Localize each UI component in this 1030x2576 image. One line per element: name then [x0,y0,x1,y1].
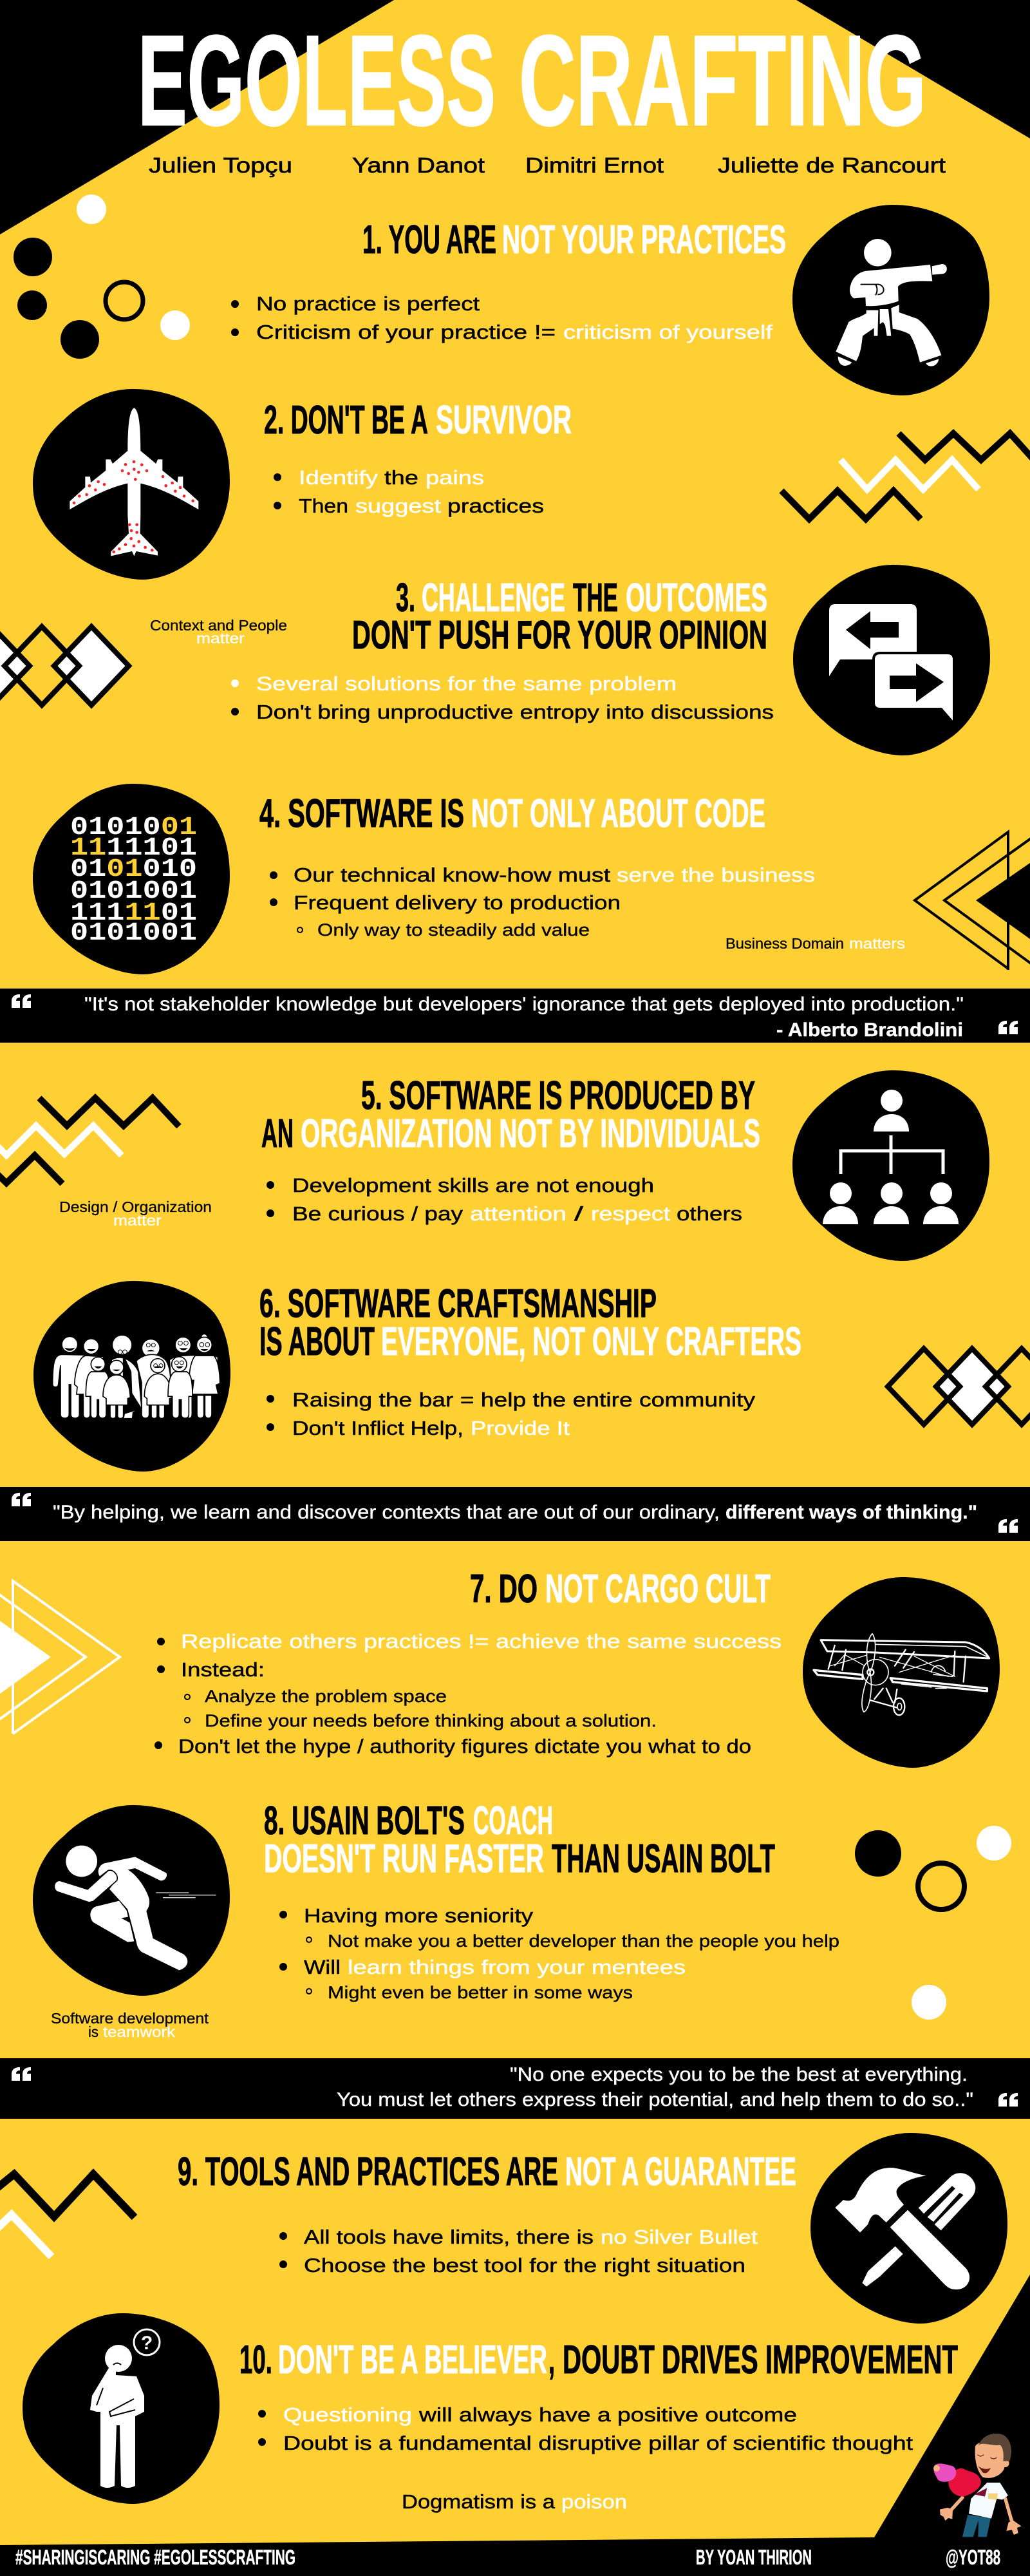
note: context and people: Context and People [150,617,287,634]
bullets 2: practices [447,495,544,517]
note: dogmatism is a poison [402,2490,627,2513]
authors: Dimitri Ernot [525,153,664,177]
decor: zigzags right [782,433,1030,519]
bullets 4: serve the business [617,864,815,886]
bullets 4: Our technical know-how must [294,864,610,886]
quote bar 3 [0,2058,1030,2119]
panel 3: challenge the outcomes [0,565,990,755]
bullets 6: Raising the bar = help the entire community [292,1388,756,1411]
heading 2: SURVIVOR [436,398,572,442]
icon: binary code: 1111101 [70,834,197,863]
note: dogmatism is a poison: poison [561,2490,627,2513]
heading 6: 6. SOFTWARE CRAFTSMANSHIP [259,1282,657,1326]
heading 5 [261,1074,760,1156]
bullets 6: Provide It [471,1417,570,1439]
authors [149,153,946,177]
bullets 10: Questioning [283,2403,412,2426]
decor: zigzags left [0,1098,179,1184]
bullets 5 [267,1174,742,1225]
bullets 7: Don't let the hype / authority figures dictate you what to do [178,1735,751,1757]
top right black corner [796,0,1030,138]
bullets 1: No practice is perfect [256,292,480,315]
bullets 5: attention [470,1202,566,1225]
footer hashtags: #SHARINGISCARING #EGOLESSCRAFTING [15,2546,295,2569]
icon: chat bubbles [793,565,990,755]
bullets 5: respect [591,1202,670,1225]
decor: chevrons right [915,832,1030,970]
heading 3: OUTCOMES [626,576,767,620]
note: context and people: matter [196,630,245,647]
heading 10 [239,2338,958,2382]
icon: biplane [803,1577,1000,1768]
icon: avatar with heart [933,2434,1022,2537]
bullets 10 [258,2403,913,2454]
opening quote mark [12,994,31,1008]
decor: circles right [855,1826,1011,2020]
quote text [53,1502,977,1523]
heading 8: DOESN'T RUN FASTER [264,1837,544,1881]
bullets 8: Having more seniority [304,1904,534,1927]
bullets 1: criticism of yourself [563,321,772,343]
heading 6: IS ABOUT [259,1320,375,1364]
bullets 9: All tools have limits, there is [304,2226,594,2248]
heading 5: AN [261,1112,294,1156]
panel 9: tools and practices [0,2133,1007,2324]
icon: karate figure [792,205,989,395]
bullets 4: Only way to steadily add value [317,920,590,940]
footer band [0,2537,1030,2576]
heading 8 [264,1799,775,1881]
note: software development is teamwork: Software development [51,2010,209,2027]
bullets 2: pains [426,466,484,489]
heading 3: DON'T PUSH FOR YOUR OPINION [352,613,767,658]
panel 2: don't be a survivor [33,389,1030,580]
bullets 2: suggest [355,495,441,517]
heading 1: 1. YOU ARE [362,218,496,262]
bullets 3: Don't bring unproductive entropy into discussions [256,701,774,723]
note: design organization: Design / Organization [59,1198,212,1215]
icon: group of people [33,1281,230,1472]
footer handle: @YOT88 [946,2546,1000,2569]
quote text [337,2064,973,2110]
heading 9: 9. TOOLS AND PRACTICES ARE [178,2150,558,2194]
bullets 8: learn things from your mentees [348,1956,686,1978]
panel 10: don't be a believer [23,2313,1022,2537]
note: design organization [59,1198,212,1229]
icon: binary code [33,784,230,974]
bullets 2: Identify [299,466,379,489]
note: context and people [150,617,287,647]
icon: binary code: 0101001 [70,919,197,948]
icon: binary code: 01010 01 [70,813,197,842]
decor: diamonds right [888,1349,1030,1425]
note: software development is teamwork: teamwork [103,2023,176,2040]
icon: thinking person: ? [141,2333,153,2354]
bullets 5: others [677,1202,742,1225]
authors: Juliette de Rancourt [718,153,946,177]
bullets 2: Then [299,495,348,517]
quote text: "By helping, we learn and discover contexts that are out of our ordinary, [53,1502,720,1523]
heading 10: 10. [239,2338,272,2382]
heading 4: 4. SOFTWARE IS [259,791,464,836]
heading 8: THAN USAIN BOLT [552,1837,775,1881]
footer author: BY YOAN THIRION [696,2546,812,2569]
decor: circles top left [14,194,190,359]
bullets 3 [231,672,774,723]
heading 3: CHALLENGE [422,576,565,620]
bullets 5: Development skills are not enough [292,1174,654,1197]
bullets 7: Analyze the problem space [205,1687,447,1706]
bullets 8: Might even be better in some ways [328,1983,633,2002]
heading 3: 3. [396,576,415,620]
heading 2: 2. DON'T BE A [264,398,428,442]
quote bar 1 [0,989,1030,1043]
quote text: - Alberto Brandolini [776,1019,963,1041]
closing quote mark [998,1519,1018,1533]
bullets 8: Will [304,1956,341,1978]
bullets 4 [270,864,815,940]
closing quote mark [998,1021,1018,1034]
bullets 2 [274,466,544,517]
heading 1: NOT YOUR PRACTICES [502,218,786,262]
panel 7: do not cargo cult [0,1567,1000,1768]
note: software development is teamwork: is [88,2023,98,2040]
authors: Yann Danot [352,153,485,177]
closing quote mark [998,2093,1018,2107]
heading 7: NOT CARGO CULT [545,1567,771,1611]
note: business domain [726,935,905,952]
icon: binary code: 0101010 [70,855,197,884]
panel 4: software is not only about code [33,784,1030,974]
quote text: different ways of thinking." [726,1502,977,1523]
panel 8: usain bolt's coach [33,1799,1011,2040]
heading 5: ORGANIZATION NOT BY INDIVIDUALS [301,1112,760,1156]
title: EGOLESS [138,9,496,153]
note: dogmatism is a poison: Dogmatism is a [402,2490,556,2513]
panel 5: produced by an organization [0,1070,989,1261]
bottom right black corner [874,2275,1030,2550]
heading 4: NOT ONLY ABOUT CODE [471,791,765,836]
heading 4 [259,791,765,836]
icon: airplane with bullet holes [33,389,230,580]
heading 8: COACH [473,1799,553,1843]
note: business domain: matters [849,935,905,952]
icon: binary code: 111 1101 [70,899,197,928]
top left black corner [0,0,394,234]
quote text: You must let others express their potential, and help them to do so.." [337,2089,973,2110]
decor: zigzags left [0,2174,135,2257]
bullets 1: Criticism of your practice != [256,321,556,343]
bullets 1 [231,292,772,343]
bullets 3: Several solutions for the same problem [256,672,677,695]
panel 6: software craftsmanship [33,1281,1030,1472]
icon: organization chart [792,1070,989,1261]
heading 10: , [548,2338,555,2382]
bullets 4: Frequent delivery to production [294,891,621,914]
note: design organization: matter [113,1212,162,1229]
icon: runner [33,1805,230,1996]
quote text: "No one expects you to be the best at everything. [510,2064,968,2085]
opening quote mark [12,1493,31,1506]
decor: diamonds left [0,627,129,705]
icon: thinking person [23,2313,220,2504]
icon: binary code: 0101001 [70,877,197,906]
bullets 5: / [574,1202,584,1225]
bullets 7 [154,1630,782,1757]
bullets 9: Choose the best tool for the right situation [304,2254,745,2277]
heading 6 [259,1282,801,1364]
bullets 7: Instead: [181,1658,265,1681]
bullets 6: Don't Inflict Help, [292,1417,464,1439]
quote text: "It's not stakeholder knowledge but developers' ignorance that gets deployed into production." [84,994,964,1015]
note: business domain: Business Domain [726,935,844,952]
heading 1 [362,218,786,262]
decor: white chevrons left [0,1581,120,1734]
quote text [84,994,964,1041]
heading 3 [352,576,767,658]
heading 5: 5. SOFTWARE IS PRODUCED BY [361,1074,755,1118]
bullets 10: Doubt is a fundamental disruptive pillar of scientific thought [283,2432,913,2454]
heading 9: NOT A GUARANTEE [565,2150,796,2194]
bullets 9: no Silver Bullet [601,2226,758,2248]
bullets 7: Replicate others practices != achieve the same success [181,1630,782,1653]
heading 7 [470,1567,771,1611]
note: software development is teamwork [51,2010,209,2040]
bullets 6 [267,1388,756,1439]
opening quote mark [12,2067,31,2081]
bullets 5: Be curious / pay [292,1202,464,1225]
heading 3: THE [573,576,618,620]
bullets 2: the [384,466,418,489]
bullets 9 [279,2226,758,2277]
quote bar 2 [0,1487,1030,1541]
bullets 8: Not make you a better developer than the people you help [328,1931,839,1951]
bullets 8 [279,1904,839,2002]
bullets 10: will always have a positive outcome [418,2403,797,2426]
icon: hammer and screwdriver [810,2133,1007,2324]
heading 8: 8. USAIN BOLT'S [264,1799,465,1843]
heading 7: 7. DO [470,1567,538,1611]
heading 10: DON'T BE A BELIEVER [278,2338,547,2382]
panel 1: you are not your practices [231,205,989,395]
authors: Julien Topçu [149,153,292,177]
bullets 7: Define your needs before thinking about a solution. [205,1711,657,1730]
